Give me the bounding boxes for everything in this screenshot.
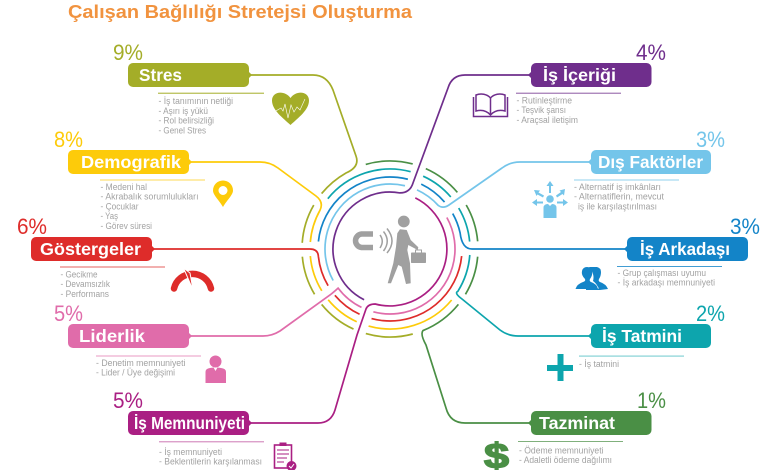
details: Demografik: - Çocuklar	[100, 202, 138, 212]
icon: clipboard checklist	[274, 442, 296, 470]
details: Demografik: - Görev süresi	[100, 221, 152, 231]
panel: Tazminat	[422, 304, 666, 470]
panel: Liderlik	[54, 288, 362, 383]
label pill: İş Memnuniyeti: İş Memnuniyeti	[134, 413, 245, 433]
details: Dış Faktörler: - Alternatif iş imkânları	[574, 182, 661, 192]
label pill: Tazminat	[528, 411, 652, 435]
panel: Stres	[113, 40, 357, 194]
connector: Dış Faktörler	[417, 162, 591, 207]
label pill: İş Tatmini: İş Tatmini	[602, 326, 682, 346]
connector: Demografik	[189, 162, 321, 242]
details: Göstergeler: - Devamsızlık	[60, 279, 110, 289]
connector: Göstergeler	[152, 249, 328, 286]
details: Göstergeler: - Performans	[60, 289, 109, 299]
details: Dış Faktörler: - Alternatiflerin, mevcut	[574, 192, 664, 202]
label pill: Stres: Stres	[139, 65, 182, 85]
icon: plus	[547, 354, 573, 381]
icon: open book	[474, 94, 508, 116]
icon: heart with pulse	[272, 93, 309, 125]
details: İş İçeriği: - Araçsal iletişim	[516, 115, 578, 125]
percentage: Demografik: 8%	[54, 127, 83, 152]
percentage: Stres: 9%	[113, 40, 143, 65]
details: Tazminat: - Adaletli ödeme dağılımı	[519, 455, 612, 465]
percentage: İş İçeriği: 4%	[636, 40, 666, 65]
details: Stres: - İş tanımının netliği	[158, 96, 233, 106]
icon: gauge	[174, 268, 211, 290]
label pill: Demografik: Demografik	[81, 152, 181, 172]
percentage: İş Memnuniyeti: 5%	[113, 388, 143, 413]
label pill: İş Tatmini	[588, 324, 711, 348]
details: İş Arkadaşı	[617, 266, 722, 288]
icon: walking person with briefcase	[388, 216, 426, 284]
details: Demografik	[100, 180, 205, 231]
connector: İş İçeriği	[333, 75, 531, 300]
percentage: Liderlik: 5%	[54, 301, 83, 326]
label pill: Dış Faktörler: Dış Faktörler	[598, 152, 703, 172]
details: İş Arkadaşı: - İş arkadaşı memnuniyeti	[618, 278, 715, 288]
percentage: Tazminat: 1%	[637, 388, 666, 413]
details: İş Arkadaşı: - Grup çalışması uyumu	[618, 268, 706, 278]
details: Stres: - Rol belirsizliği	[158, 116, 214, 126]
label pill: Göstergeler: Göstergeler	[40, 239, 141, 259]
details: Tazminat	[518, 441, 623, 465]
panel: Göstergeler	[17, 214, 328, 299]
concentric ring segments	[269, 128, 511, 370]
icon: magnetic waves	[380, 228, 392, 253]
details: İş İçeriği	[516, 93, 621, 125]
details: İş Memnuniyeti: - Beklentilerin karşılanması	[159, 456, 262, 466]
connector: İş Memnuniyeti	[249, 198, 447, 423]
percentage: İş Tatmini: 2%	[696, 301, 725, 326]
title: Çalışan Bağlılığı Stretejsi Oluşturma	[68, 1, 413, 22]
details: Demografik: - Medeni hal	[100, 182, 147, 192]
label pill: Liderlik: Liderlik	[79, 326, 145, 346]
icon: person with outward arrows	[532, 181, 568, 218]
icon: location pin	[213, 181, 233, 207]
connector: Tazminat	[422, 304, 531, 423]
percentage: Göstergeler: 6%	[17, 214, 47, 239]
details: Dış Faktörler	[574, 180, 679, 212]
panel: Demografik	[54, 127, 321, 242]
details: Stres: - Genel Stres	[158, 126, 206, 136]
label pill: Stres	[128, 63, 252, 87]
details: Tazminat: - Ödeme memnuniyeti	[519, 446, 604, 456]
details: Demografik: - Akrabalık sorumlulukları	[100, 192, 198, 202]
label pill: İş İçeriği: İş İçeriği	[543, 65, 616, 85]
details: İş Memnuniyeti: - İş memnuniyeti	[159, 447, 222, 457]
details: Göstergeler: - Gecikme	[60, 270, 98, 280]
details: Stres: - Aşırı iş yükü	[158, 106, 208, 116]
connector: İş Arkadaşı	[453, 214, 627, 249]
details: İş Memnuniyeti	[159, 441, 264, 466]
details: Göstergeler	[60, 266, 165, 299]
panel: İş İçeriği	[333, 40, 666, 300]
panel: Dış Faktörler	[417, 127, 725, 218]
panel: İş Tatmini	[457, 255, 725, 381]
details: Liderlik: - Lider / Üye değişimi	[96, 368, 175, 378]
details: Liderlik	[96, 356, 201, 378]
label pill: İş Arkadaşı	[624, 237, 748, 261]
label pill: Demografik	[68, 150, 192, 174]
center icon: magnet attracting a walking person	[356, 216, 426, 284]
label pill: İş Arkadaşı: İş Arkadaşı	[640, 239, 730, 259]
percentage: Dış Faktörler: 3%	[696, 127, 725, 152]
icon: magnet	[356, 234, 373, 248]
panel: İş Memnuniyeti	[113, 198, 447, 470]
connector: Stres	[249, 75, 357, 194]
icon: leader	[206, 356, 226, 383]
details: Stres	[158, 93, 264, 136]
connector: Liderlik	[189, 288, 362, 336]
details: İş İçeriği: - Rutinleştirme	[516, 96, 572, 106]
connector: İş Tatmini	[457, 255, 591, 336]
label pill: Göstergeler	[31, 237, 155, 261]
details: Dış Faktörler: iş ile karşılaştırılması	[578, 202, 657, 212]
label pill: Tazminat: Tazminat	[539, 413, 615, 433]
details: İş İçeriği: - Teşvik şansı	[516, 105, 566, 115]
details: Liderlik: - Denetim memnuniyeti	[96, 358, 186, 368]
percentage: İş Arkadaşı: 3%	[730, 214, 760, 239]
panel: İş Arkadaşı	[453, 214, 760, 290]
details: İş Tatmini	[579, 356, 684, 369]
details: İş Tatmini: - İş tatmini	[579, 359, 619, 369]
details: Demografik: - Yaş	[100, 211, 118, 221]
icon: group of people	[576, 267, 608, 290]
label pill: Liderlik	[68, 324, 192, 348]
label pill: İş İçeriği	[528, 63, 652, 87]
